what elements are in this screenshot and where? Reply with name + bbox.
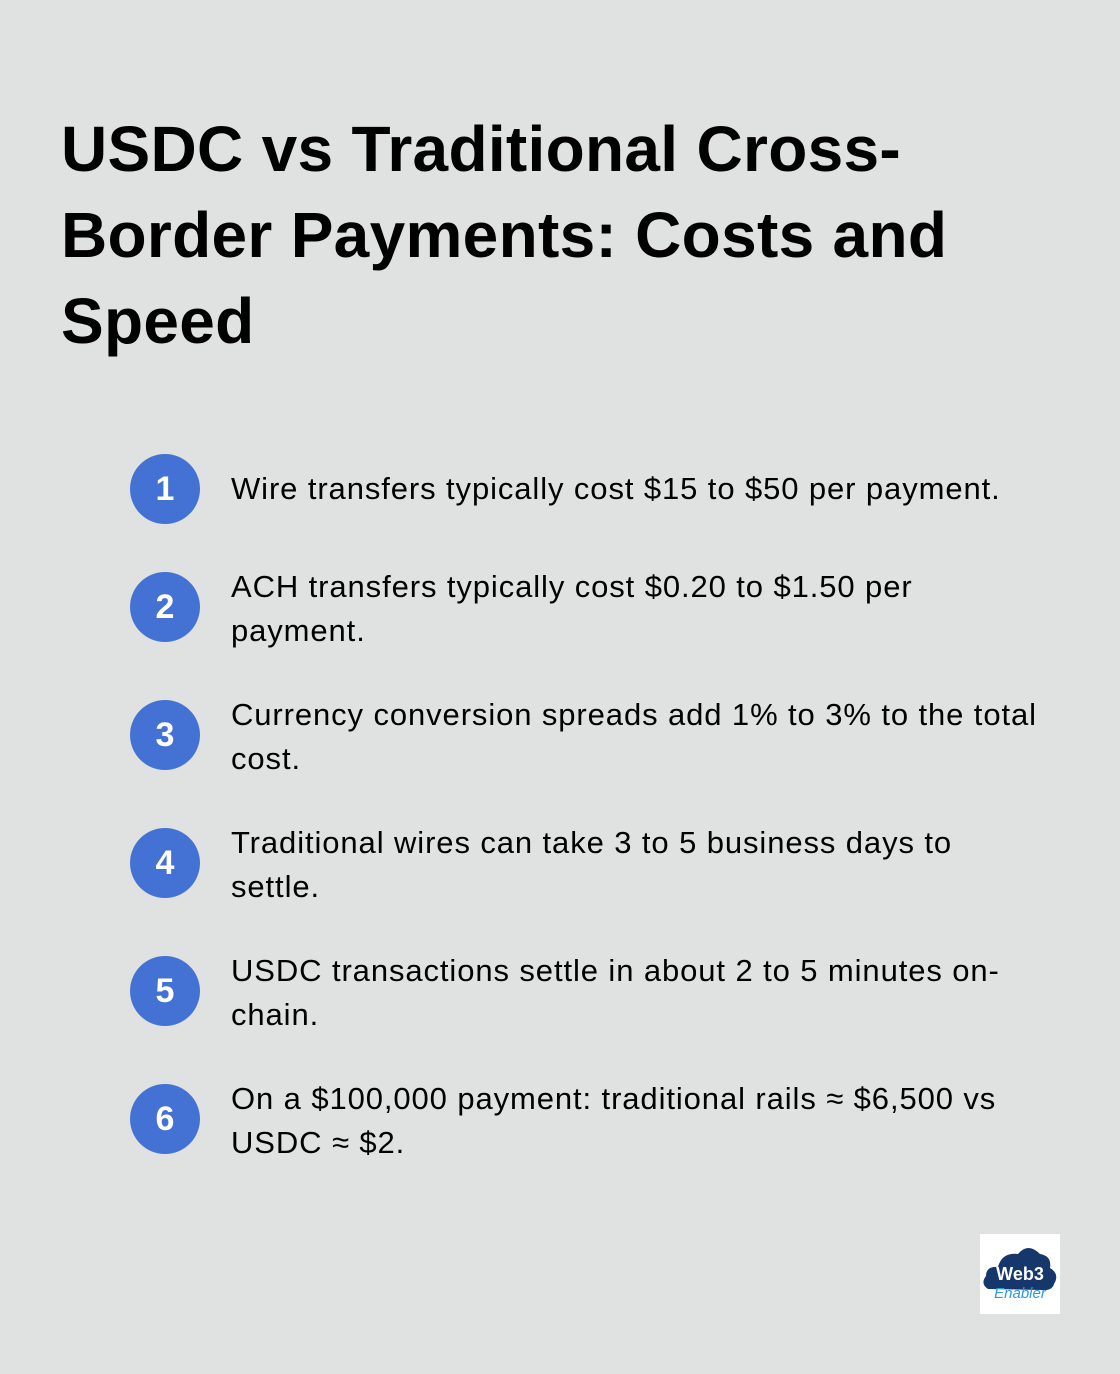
badge 2: 2 bbox=[156, 588, 174, 626]
text 3: Currency conversion spreads add 1% to 3% to the total bbox=[231, 697, 1037, 732]
text 1: Wire transfers typically cost $15 to $50 per payment. bbox=[231, 471, 1001, 506]
text 3: cost. bbox=[231, 741, 301, 776]
text 6 bbox=[231, 1081, 996, 1160]
text 2: payment. bbox=[231, 613, 366, 648]
text 6: USDC ≈ $2. bbox=[231, 1125, 405, 1160]
badge 3: 3 bbox=[156, 716, 174, 754]
text 4: settle. bbox=[231, 869, 320, 904]
text 2: ACH transfers typically cost $0.20 to $1.50 per bbox=[231, 569, 913, 604]
text 5 bbox=[231, 953, 1000, 1032]
badge 6: 6 bbox=[156, 1100, 174, 1138]
badge 6 bbox=[130, 1084, 200, 1154]
logo bbox=[980, 1234, 1060, 1314]
text 4 bbox=[231, 825, 952, 904]
badge 4 bbox=[130, 828, 200, 898]
badge 2 bbox=[130, 572, 200, 642]
title bbox=[61, 113, 947, 357]
title: Speed bbox=[61, 285, 255, 357]
badge 1: 1 bbox=[156, 470, 174, 508]
badge 1 bbox=[130, 454, 200, 524]
text 2 bbox=[231, 569, 913, 648]
badge 4: 4 bbox=[156, 844, 174, 882]
logo: Web3 bbox=[996, 1264, 1044, 1284]
badge 3 bbox=[130, 700, 200, 770]
text 6: On a $100,000 payment: traditional rails ≈ $6,500 vs bbox=[231, 1081, 996, 1116]
logo: Enabler bbox=[994, 1285, 1047, 1302]
title: USDC vs Traditional Cross- bbox=[61, 113, 901, 185]
badge 5 bbox=[130, 956, 200, 1026]
text 5: chain. bbox=[231, 997, 319, 1032]
text 5: USDC transactions settle in about 2 to 5 minutes on- bbox=[231, 953, 1000, 988]
badge 5: 5 bbox=[156, 972, 174, 1010]
title: Border Payments: Costs and bbox=[61, 199, 947, 271]
text 3 bbox=[231, 697, 1037, 776]
text 4: Traditional wires can take 3 to 5 business days to bbox=[231, 825, 952, 860]
